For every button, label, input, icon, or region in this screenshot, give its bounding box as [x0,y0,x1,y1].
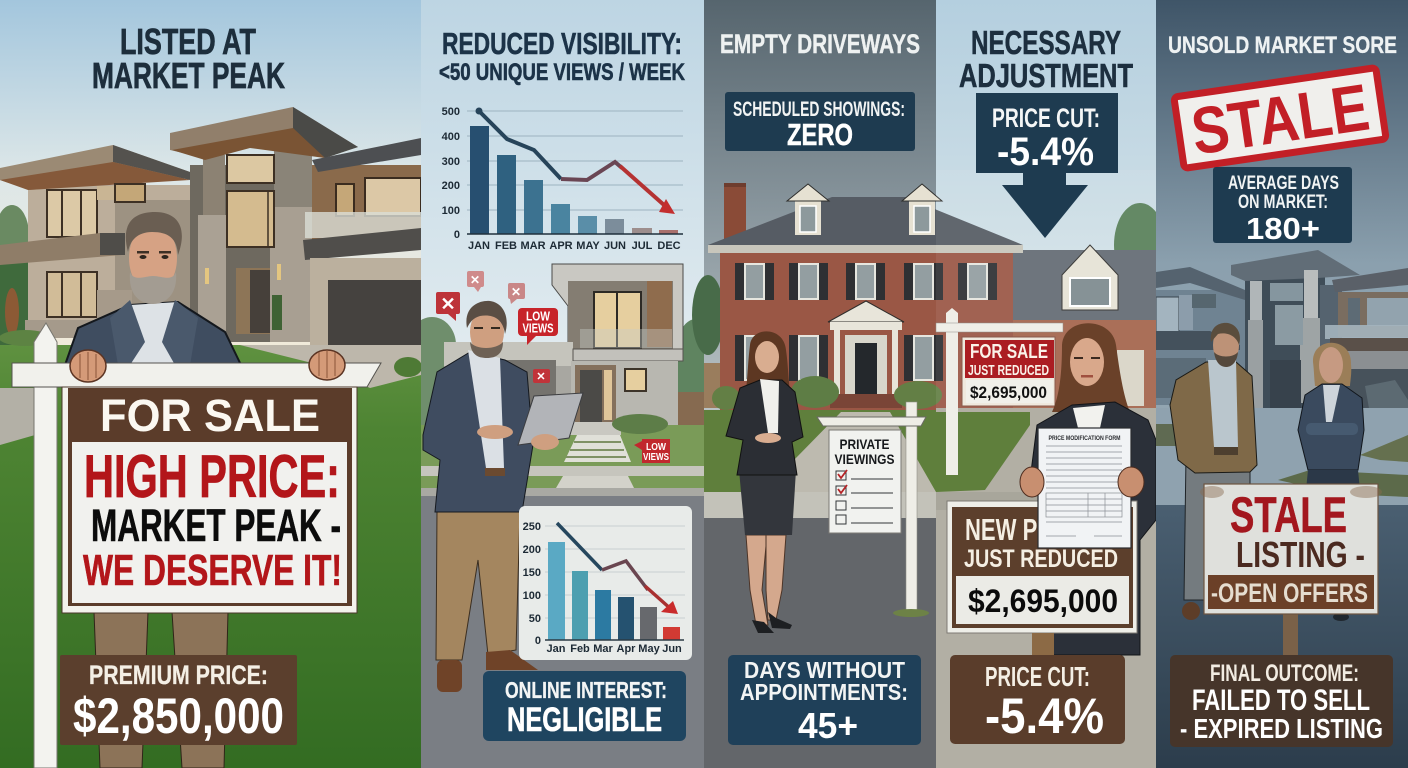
callout: price cut top: -5.4% [997,130,1094,174]
background trees [408,317,714,425]
callout: online interest: ONLINE INTEREST: [505,677,667,703]
chart: online interest card: 150 [523,567,541,579]
callout: premium price [60,655,297,745]
panel: listed at market peak [0,0,422,768]
chart: online interest card: Jun [662,643,682,655]
woman with crossed arms [1298,343,1364,621]
callout: average days on market: 180+ [1246,211,1320,246]
private viewings checklist sign: PRIVATE [840,436,890,452]
sign: new price [947,501,1137,655]
sign: high price: WE DESERVE IT! [83,546,342,595]
callout: low views on lawn [634,439,670,463]
chart: weekly views bars and trend: MAY [576,240,600,252]
title: listed at market peak: LISTED AT [120,21,256,62]
chart: weekly views bars and trend: DEC [657,240,681,252]
lawn, driveway and pavement [936,408,1156,768]
sign: new price: $2,695,000 [968,583,1118,619]
callout: days without appointments: 45+ [798,705,858,746]
sign: new price: NEW PRICE [965,512,1090,547]
chart: online interest card: May [638,643,661,655]
callout: online interest [483,671,686,741]
chart: weekly views bars and trend: JAN [468,240,490,252]
callout: price cut top [976,93,1118,174]
background trees [0,205,30,345]
callout: average days on market [1213,167,1352,246]
chart: weekly views bars and trend: JUL [632,240,653,252]
for sale just reduced signpost: JUST REDUCED [968,362,1049,379]
chart: weekly views bars and trend: 0 [454,229,460,241]
callout: price cut bottom [950,655,1125,744]
callout: days without appointments [728,655,921,746]
background trees and fence [692,275,724,408]
chart: weekly views bars and trend: APR [549,240,573,252]
callout: average days on market: AVERAGE DAYS [1228,173,1339,194]
callout: low views on lawn: LOW [646,442,666,453]
panel: reduced visibility [408,0,714,768]
document: price modification form [1038,428,1131,548]
for sale just reduced signpost [936,308,1063,475]
callout: average days on market: ON MARKET: [1238,192,1328,213]
sign: high price: FOR SALE [100,390,320,441]
icon: agent hands [70,350,345,382]
callout: online interest: NEGLIGIBLE [507,701,662,739]
private viewings checklist sign [817,402,929,617]
title: listed at market peak: MARKET PEAK [92,55,285,96]
dark house [1156,250,1408,414]
arrow: price going down [1002,170,1088,238]
title: necessary adjustment [959,24,1133,94]
callout: price cut bottom: PRICE CUT: [985,661,1090,692]
chart: online interest card: 100 [523,590,541,602]
callout: scheduled showings: SCHEDULED SHOWINGS: [733,98,905,121]
panel: necessary adjustment [936,24,1156,768]
chart: online interest card: 50 [529,613,541,625]
title: necessary adjustment: NECESSARY [971,24,1121,61]
icon: reject bubbles: ✕ [440,294,456,314]
for sale just reduced signpost: FOR SALE [970,341,1048,363]
icon: reject bubbles: ✕ [536,371,546,383]
sign: stale listing: STALE [1230,487,1347,543]
callout: low views: VIEWS [522,322,554,336]
title: reduced visibility: REDUCED VISIBILITY: [442,26,682,61]
chart: weekly views bars and trend: 200 [442,180,460,192]
brick colonial house [708,183,1023,410]
icon: agent hands holding form [1020,467,1144,497]
callout: premium price: PREMIUM PRICE: [89,660,268,690]
icon: reject bubbles: ✕ [470,273,480,287]
lawn, walkway and street [421,414,704,768]
chart: online interest card: Jan [547,643,566,655]
chart: online interest card: Apr [617,643,636,655]
wet ground, lawn and street [1156,408,1408,768]
callout: premium price: $2,850,000 [73,688,284,744]
chart: weekly views bars and trend [442,106,683,252]
sign: high price: MARKET PEAK - [91,500,341,551]
agent waiting [726,331,803,633]
panel background: adjustment sky and second home [936,0,1166,420]
title: reduced visibility [440,32,686,86]
document: price modification form: PRICE MODIFICATION FORM [1048,435,1120,442]
panel: unsold market sore [1156,0,1408,768]
chart: online interest card: Feb [570,643,590,655]
for sale signpost [12,323,381,768]
panel: empty driveways [692,0,1023,768]
modern house [0,107,421,348]
callout: days without appointments: APPOINTMENTS: [740,679,908,705]
for sale just reduced signpost: $2,695,000 [970,383,1047,402]
sign: new price: JUST REDUCED [964,545,1118,573]
callout: low views [518,308,558,345]
chart: weekly views bars and trend: MAR [520,240,546,252]
chart: weekly views bars and trend: FEB [495,240,517,252]
title: empty driveways: EMPTY DRIVEWAYS [720,29,920,59]
chart: weekly views bars and trend: 400 [442,131,460,143]
icon: reject bubbles: ✕ [511,285,521,299]
sign: stale listing: LISTING - [1236,534,1365,575]
lawn, driveway and street [704,410,936,768]
callout: low views: LOW [526,310,550,324]
lawn and driveway [0,288,422,768]
sign: high price [62,387,357,613]
stamp: stale: STALE [1187,70,1374,168]
chart: weekly views bars and trend: JUN [604,240,626,252]
agent with laptop [423,301,583,692]
callout: days without appointments: DAYS WITHOUT [744,657,905,683]
callout: scheduled showings: ZERO [787,117,853,152]
chart: online interest card: 0 [535,635,541,647]
sign: stale listing: -OPEN OFFERS [1211,578,1368,608]
chart: online interest card [519,506,692,660]
icon: reject bubbles [436,271,550,383]
title: reduced visibility: <50 UNIQUE VIEWS / WEEK [439,59,686,86]
private viewings checklist sign: VIEWINGS [834,451,894,467]
chart: online interest card: 200 [523,544,541,556]
agent with form [1030,323,1156,655]
callout: final outcome [1170,655,1393,747]
callout: price cut bottom: -5.4% [985,688,1104,744]
chart: weekly views bars and trend: 300 [442,156,460,168]
callout: price cut top: PRICE CUT: [992,103,1100,133]
chart: online interest card: Mar [593,643,613,655]
agent holding sign [65,212,241,768]
man in brown jacket [1170,323,1257,620]
chart: weekly views bars and trend: 100 [442,205,460,217]
chart: online interest card: 250 [523,521,541,533]
modern house [444,264,683,426]
callout: scheduled showings [725,92,915,152]
title: necessary adjustment: ADJUSTMENT [959,57,1133,94]
callout: low views on lawn: VIEWS [643,452,669,463]
sign: stale listing [1200,484,1382,658]
title: listed at market peak [94,28,286,88]
chart: weekly views bars and trend: 500 [442,106,460,118]
sign: high price: HIGH PRICE: [84,443,340,510]
